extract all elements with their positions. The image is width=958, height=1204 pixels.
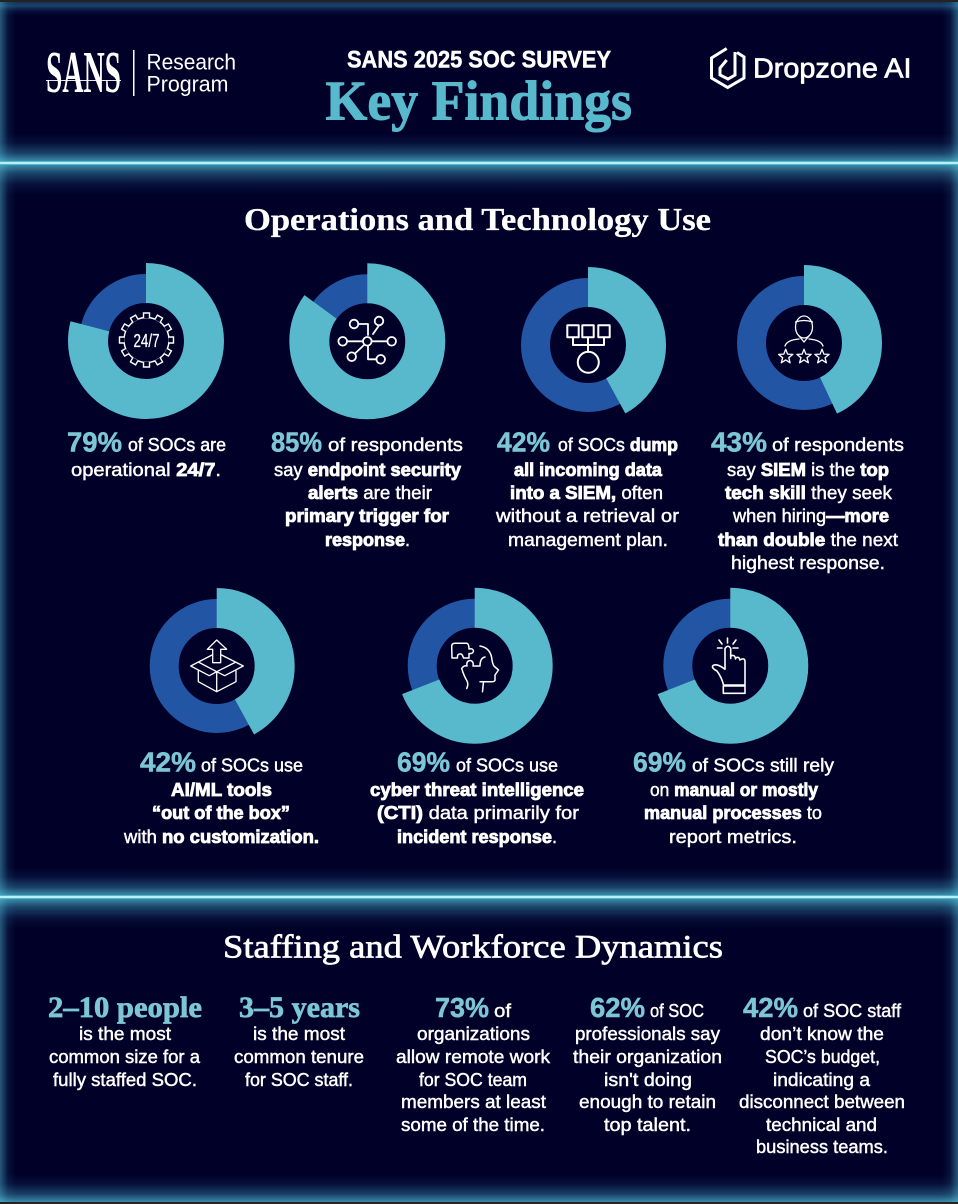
- stat: retention: of SOC: [650, 1000, 704, 1021]
- stat: team size: is the most: [79, 1023, 171, 1044]
- text: 85% finding: alerts are their: [308, 482, 432, 503]
- heading: Operations and Technology Use: Operations and Technology Use: [244, 201, 711, 237]
- icon: 24/7 gear: [120, 313, 174, 367]
- stat: team size: [48, 991, 202, 1090]
- donut chart: 85%: [309, 283, 425, 399]
- stat: budget awareness: technical and: [766, 1114, 877, 1135]
- logo: SANS Research Program: SANS: [46, 39, 121, 105]
- text: 43% finding: of respondents: [772, 434, 904, 455]
- text: 85% finding: 85%: [271, 426, 322, 458]
- stat: budget awareness: don’t know the: [760, 1023, 884, 1044]
- text: 69% CTI finding: [370, 747, 584, 847]
- text: 42% AI/ML finding: [123, 747, 319, 847]
- stat: retention: 62%: [590, 992, 645, 1023]
- text: 43% finding: highest response.: [731, 552, 885, 573]
- icon: pointing hand: [712, 638, 745, 693]
- stat: tenure: [234, 991, 364, 1090]
- text: 69% manual finding: of SOCs still rely: [692, 754, 835, 776]
- icon: box with up arrow: [191, 640, 243, 692]
- stat: remote work: [396, 992, 551, 1135]
- donut chart: 43%: [746, 285, 862, 401]
- card: 42% AI/ML tools: [123, 608, 319, 847]
- text: 42% SIEM finding: [495, 426, 679, 550]
- text: 79% finding: operational 24/7.: [71, 459, 221, 480]
- donut chart: 79%: [88, 283, 204, 399]
- text: 85% finding: primary trigger for: [285, 505, 449, 526]
- panel: header background: [0, 2, 958, 161]
- icon: person with three stars: [779, 316, 829, 363]
- text: 42% SIEM finding: without a retrieval or: [495, 505, 679, 526]
- stat: remote work: 73%: [435, 992, 489, 1023]
- icon: puzzle head: [452, 643, 498, 692]
- text: 79% finding: [67, 426, 226, 480]
- text: 43% finding: [711, 426, 904, 573]
- text: 43% finding: 43%: [711, 426, 767, 458]
- icon: 24/7 gear: 24/7: [134, 331, 160, 351]
- card: 69% manual processes: [633, 608, 835, 847]
- icon: hierarchy diagram: [567, 325, 610, 373]
- stat: remote work: allow remote work: [396, 1046, 551, 1067]
- stat: team size: common size for a: [49, 1046, 201, 1067]
- text: 43% finding: tech skill they seek: [725, 482, 893, 503]
- stat: remote work: members at least: [401, 1091, 546, 1112]
- logo: Dropzone AI: [712, 48, 912, 88]
- donut chart: 69%: [417, 608, 533, 724]
- donut chart: 42%: [159, 608, 275, 724]
- stat: budget awareness: 42%: [743, 992, 798, 1023]
- stat: budget awareness: of SOC staff: [803, 1000, 902, 1021]
- stat: remote work: some of the time.: [401, 1114, 545, 1135]
- text: 42% SIEM finding: into a SIEM, often: [510, 482, 663, 503]
- text: 42% AI/ML finding: “out of the box”: [152, 802, 290, 823]
- text: 42% SIEM finding: 42%: [497, 426, 550, 458]
- text: 42% AI/ML finding: with no customization.: [123, 826, 319, 847]
- logo: Dropzone AI: Dropzone AI: [753, 53, 912, 84]
- stat: budget awareness: [739, 992, 905, 1157]
- stat: remote work: for SOC team: [419, 1069, 527, 1090]
- text: 69% manual finding: 69%: [633, 747, 686, 778]
- stat: tenure: for SOC staff.: [245, 1069, 353, 1090]
- title: survey name and Key Findings: Key Findings: [326, 70, 632, 132]
- text: 85% finding: [271, 426, 463, 550]
- text: 42% SIEM finding: management plan.: [508, 529, 668, 550]
- panel: operations background: [0, 165, 958, 895]
- text: 85% finding: say endpoint security: [274, 459, 462, 480]
- stat: tenure: common tenure: [234, 1046, 364, 1067]
- stat: retention: their organization: [573, 1046, 722, 1067]
- stat: budget awareness: business teams.: [756, 1136, 888, 1157]
- text: 69% CTI finding: cyber threat intelligence: [370, 779, 584, 800]
- text: 69% manual finding: on manual or mostly: [650, 779, 819, 800]
- card: 69% CTI data: [370, 608, 584, 847]
- stat: budget awareness: indicating a: [773, 1069, 871, 1090]
- stat: retention: professionals say: [575, 1023, 721, 1044]
- stat: tenure: 3–5 years: [239, 991, 360, 1024]
- text: 79% finding: of SOCs are: [128, 434, 226, 455]
- stat: budget awareness: SOC’s budget,: [765, 1046, 880, 1067]
- text: 69% manual finding: manual processes to: [644, 802, 822, 823]
- text: 69% CTI finding: of SOCs use: [456, 754, 558, 776]
- text: 42% AI/ML finding: AI/ML tools: [171, 779, 272, 800]
- text: 69% CTI finding: incident response.: [397, 826, 557, 847]
- text: 79% finding: 79%: [67, 426, 122, 458]
- stat: team size: fully staffed SOC.: [53, 1069, 197, 1090]
- text: 69% CTI finding: 69%: [397, 747, 450, 778]
- panel: staffing background: [0, 899, 958, 1202]
- text: 42% AI/ML finding: of SOCs use: [201, 754, 303, 776]
- text: 42% SIEM finding: of SOCs dump: [558, 434, 678, 455]
- stat: tenure: is the most: [253, 1023, 345, 1044]
- stat: retention: enough to retain: [579, 1091, 716, 1112]
- text: 42% SIEM finding: all incoming data: [514, 459, 663, 480]
- icon: network nodes: [338, 317, 396, 364]
- donut chart: 69%: [672, 608, 788, 724]
- card: 42% dump data into SIEM: [495, 287, 679, 550]
- logo: SANS Research Program: Program: [146, 72, 228, 97]
- card: 85% endpoint alerts: [271, 283, 463, 550]
- text: 69% manual finding: [633, 747, 835, 847]
- stat: team size: 2–10 people: [48, 991, 202, 1024]
- heading: Staffing and Workforce Dynamics: Staffing and Workforce Dynamics: [223, 930, 723, 966]
- stat: retention: [573, 992, 722, 1135]
- text: 43% finding: than double the next: [718, 529, 898, 550]
- stat: budget awareness: disconnect between: [739, 1091, 905, 1112]
- text: 42% AI/ML finding: 42%: [140, 747, 196, 778]
- text: 43% finding: say SIEM is the top: [727, 459, 889, 480]
- text: 85% finding: response.: [325, 529, 410, 550]
- stat: retention: isn't doing: [604, 1069, 692, 1090]
- text: 43% finding: when hiring—more: [732, 505, 889, 526]
- text: 69% manual finding: report metrics.: [669, 826, 797, 847]
- card: 79% operational 24/7: [67, 283, 226, 480]
- stat: remote work: organizations: [417, 1023, 530, 1044]
- logo: SANS Research Program: Research: [146, 50, 236, 74]
- title: survey name and Key Findings: SANS 2025 SOC SURVEY: [347, 47, 611, 74]
- donut chart: 42%: [530, 287, 646, 403]
- text: 85% finding: of respondents: [328, 434, 463, 455]
- stat: remote work: of: [494, 1000, 512, 1021]
- stat: retention: top talent.: [604, 1114, 691, 1135]
- card: 43% SIEM top skill: [711, 285, 904, 573]
- text: 69% CTI finding: (CTI) data primarily for: [377, 802, 579, 823]
